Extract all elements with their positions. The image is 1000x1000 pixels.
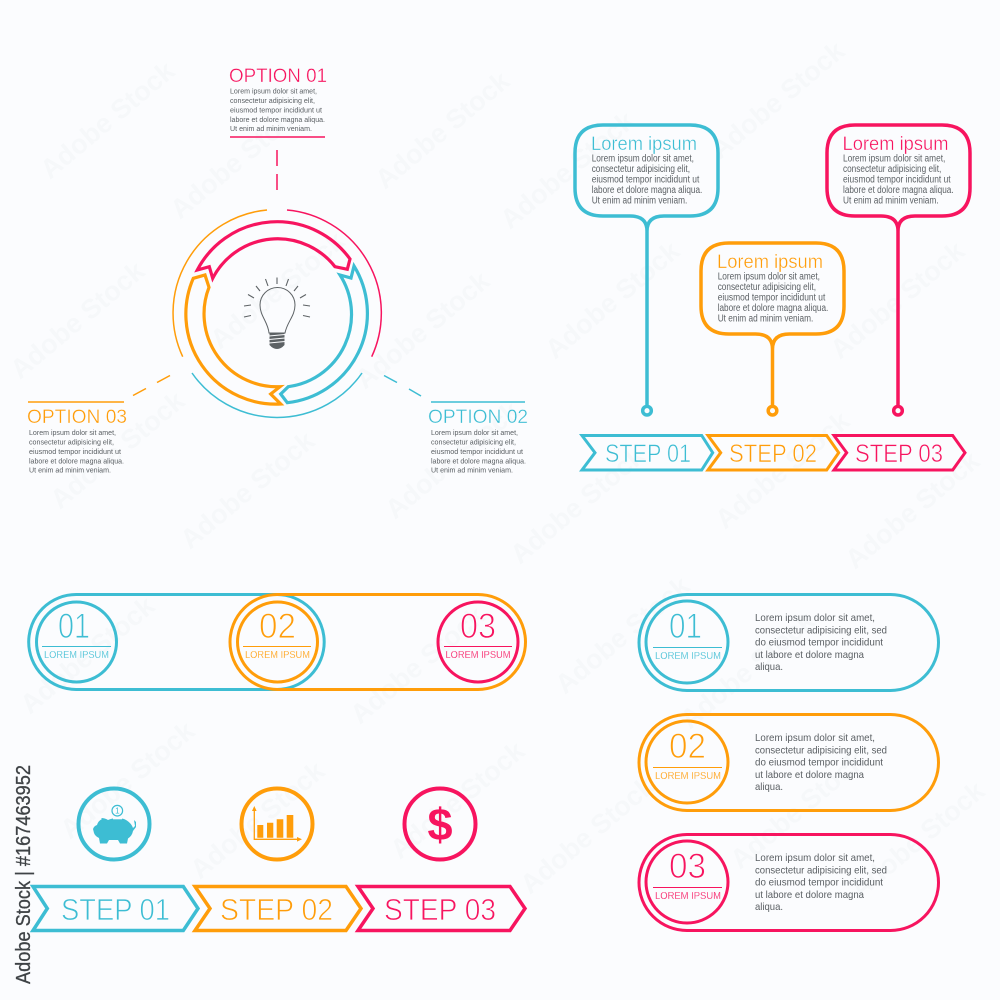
- text block: option 02: [431, 428, 526, 474]
- circle: 03: 03: [460, 607, 496, 646]
- text block: option 03: eiusmod tempor incididunt ut: [29, 447, 122, 456]
- list item 03: Lorem ipsum dolor sit amet,: [755, 853, 875, 864]
- text block: option 03: labore et dolore magna aliqua.: [29, 456, 124, 466]
- text block: option 03: Lorem ipsum dolor sit amet,: [29, 428, 116, 437]
- list item 02: LOREM IPSUM: [655, 770, 721, 782]
- watermark pattern: Adobe Stock: [165, 95, 311, 225]
- watermark pattern: Adobe Stock: [515, 770, 661, 900]
- watermark pattern: Adobe Stock: [705, 35, 851, 165]
- watermark pattern: Adobe Stock: [840, 445, 986, 575]
- circle: 03: LOREM IPSUM: [446, 649, 510, 661]
- callout: blue: eiusmod tempor incididunt ut: [592, 175, 700, 186]
- icon: light bulb: [244, 278, 310, 349]
- callout: orange: [701, 243, 844, 415]
- step arrows: bottom row: [33, 886, 525, 930]
- watermark pattern: Adobe Stock: [350, 265, 496, 395]
- text block: option 01: Ut enim ad minim veniam.: [230, 124, 312, 133]
- text block: option 02: labore et dolore magna aliqua.: [431, 456, 526, 466]
- heading: option 03: OPTION 03: [27, 407, 127, 428]
- text block: option 02: eiusmod tempor incididunt ut: [431, 447, 524, 456]
- step arrows: top row: STEP 01: [605, 440, 691, 468]
- list item 02: Lorem ipsum dolor sit amet,: [755, 733, 875, 744]
- callout: blue: labore et dolore magna aliqua.: [592, 185, 702, 196]
- panel: circular cycle diagram: [27, 66, 528, 474]
- step arrows: top row: STEP 03: [855, 440, 943, 468]
- callout: pink: Lorem ipsum: [842, 133, 948, 155]
- callout: pink: Ut enim ad minim veniam.: [843, 196, 939, 207]
- watermark pattern: Adobe Stock: [825, 235, 971, 365]
- list item 03: aliqua.: [755, 902, 783, 913]
- list item 01: LOREM IPSUM: [655, 650, 721, 662]
- step arrows: top row: [582, 436, 965, 470]
- text block: option 02: Ut enim ad minim veniam.: [431, 466, 513, 474]
- callout: blue: Lorem ipsum: [591, 133, 697, 155]
- callout: pink: consectetur adipisicing elit,: [843, 164, 941, 175]
- list item 03: [639, 834, 938, 930]
- list item 01: aliqua.: [755, 662, 783, 673]
- list item 01: Lorem ipsum dolor sit amet,: [755, 613, 875, 624]
- panel: icons and steps: [33, 788, 525, 930]
- watermark pattern: Adobe Stock: [845, 775, 991, 905]
- list item 02: 02: [669, 727, 706, 766]
- watermark pattern: Adobe Stock: [550, 570, 696, 700]
- watermark pattern: Adobe Stock: [205, 225, 351, 355]
- list item 01: ut labore et dolore magna: [755, 650, 864, 661]
- list item 03: consectetur adipisicing elit, sed: [755, 866, 887, 876]
- callout: pink: Lorem ipsum dolor sit amet,: [843, 154, 945, 165]
- text block: option 01: Lorem ipsum dolor sit amet,: [230, 86, 317, 96]
- heading: option 02: OPTION 02: [428, 407, 528, 428]
- watermark pattern: Adobe Stock: [35, 55, 181, 185]
- list item 03: ut labore et dolore magna: [755, 890, 864, 901]
- watermark pattern: Adobe Stock: [725, 745, 871, 875]
- text block: option 01: consectetur adipisicing elit,: [230, 96, 315, 105]
- callout: orange: Ut enim ad minim veniam.: [718, 314, 813, 325]
- panel: overlapping pills: [29, 594, 525, 690]
- text block: option 03: consectetur adipisicing elit,: [29, 438, 114, 446]
- watermark pattern: Adobe Stock: [710, 405, 856, 535]
- text block: option 01: labore et dolore magna aliqua.: [230, 115, 325, 124]
- pill: 02: 02: [259, 607, 296, 646]
- watermark pattern: Adobe Stock: [345, 600, 491, 730]
- list item 02: consectetur adipisicing elit, sed: [755, 746, 887, 756]
- callout: blue: [575, 125, 718, 415]
- callout: blue: Lorem ipsum dolor sit amet,: [592, 154, 694, 165]
- heading: option 01: OPTION 01: [229, 66, 327, 87]
- watermark pattern: Adobe Stock: [15, 590, 161, 720]
- text block: option 01: [230, 86, 325, 133]
- pill: 02: LOREM IPSUM: [245, 649, 310, 661]
- text block: option 01: eiusmod tempor incididunt ut: [230, 106, 323, 114]
- watermark pattern: Adobe Stock: [385, 735, 531, 865]
- list item 02: ut labore et dolore magna: [755, 770, 864, 781]
- panel: timeline callouts: [575, 125, 970, 470]
- list item 03: LOREM IPSUM: [655, 890, 721, 902]
- callout: pink: eiusmod tempor incididunt ut: [843, 175, 951, 186]
- list item 02: aliqua.: [755, 782, 783, 793]
- list item 02: do eiusmod tempor incididunt: [755, 758, 883, 768]
- watermark pattern: Adobe Stock: [380, 395, 526, 525]
- watermark pattern: Adobe Stock: [175, 425, 321, 555]
- cycle arrows: [186, 222, 367, 404]
- watermark pattern: Adobe Stock: [5, 255, 151, 385]
- step arrows: bottom row: STEP 01: [61, 892, 170, 927]
- icon: bar chart: [242, 788, 312, 860]
- icon: dollar: [404, 788, 476, 860]
- callout: orange: consectetur adipisicing elit,: [718, 282, 816, 293]
- callout: orange: eiusmod tempor incididunt ut: [718, 293, 826, 304]
- icon: dollar: $: [427, 799, 453, 850]
- watermark pattern: Adobe Stock: [495, 105, 641, 235]
- watermark pattern: Adobe Stock: [675, 605, 821, 735]
- callout: orange: Lorem ipsum: [717, 251, 823, 273]
- step arrows: bottom row: STEP 02: [220, 892, 333, 927]
- callout: orange: Lorem ipsum dolor sit amet,: [718, 272, 820, 283]
- callout: blue: Ut enim ad minim veniam.: [592, 196, 687, 207]
- text block: option 02: Lorem ipsum dolor sit amet,: [431, 428, 518, 437]
- list item 01: 01: [669, 607, 702, 646]
- callout: orange: labore et dolore magna aliqua.: [718, 303, 828, 314]
- callout: pink: labore et dolore magna aliqua.: [843, 185, 954, 196]
- callout: pink: [827, 125, 970, 415]
- step arrows: bottom row: STEP 03: [384, 892, 496, 927]
- list item 03: do eiusmod tempor incididunt: [755, 878, 883, 888]
- icon: piggy bank: [78, 788, 150, 860]
- watermark pattern: Adobe Stock: [185, 755, 331, 885]
- outer ring arcs: [173, 210, 381, 417]
- list item 03: 03: [669, 847, 706, 886]
- pill: 01: LOREM IPSUM: [44, 649, 109, 661]
- pill: 01: [29, 594, 324, 690]
- circle: 03: [438, 602, 518, 682]
- pill: 02: [230, 594, 526, 690]
- panel: numbered list pills: [639, 594, 938, 930]
- list item 01: consectetur adipisicing elit, sed: [755, 626, 887, 636]
- text block: option 03: [29, 428, 124, 474]
- icon: piggy bank: 1: [115, 806, 120, 816]
- watermark pattern: Adobe Stock: [370, 65, 516, 195]
- callout: blue: consectetur adipisicing elit,: [592, 164, 690, 175]
- pill: 01: 01: [58, 607, 90, 646]
- watermark pattern: Adobe Stock: [45, 385, 191, 515]
- list item 01: [639, 594, 938, 690]
- watermark pattern: Adobe Stock: [55, 715, 201, 845]
- text block: option 02: consectetur adipisicing elit,: [431, 438, 516, 446]
- stock credit: Adobe Stock | #167463952: [13, 765, 35, 984]
- watermark pattern: Adobe Stock: [540, 235, 686, 365]
- list item 01: do eiusmod tempor incididunt: [755, 638, 883, 648]
- list item 02: [639, 714, 938, 810]
- step arrows: top row: STEP 02: [729, 440, 817, 468]
- watermark pattern: Adobe Stock: [505, 440, 651, 570]
- text block: option 03: Ut enim ad minim veniam.: [29, 466, 111, 474]
